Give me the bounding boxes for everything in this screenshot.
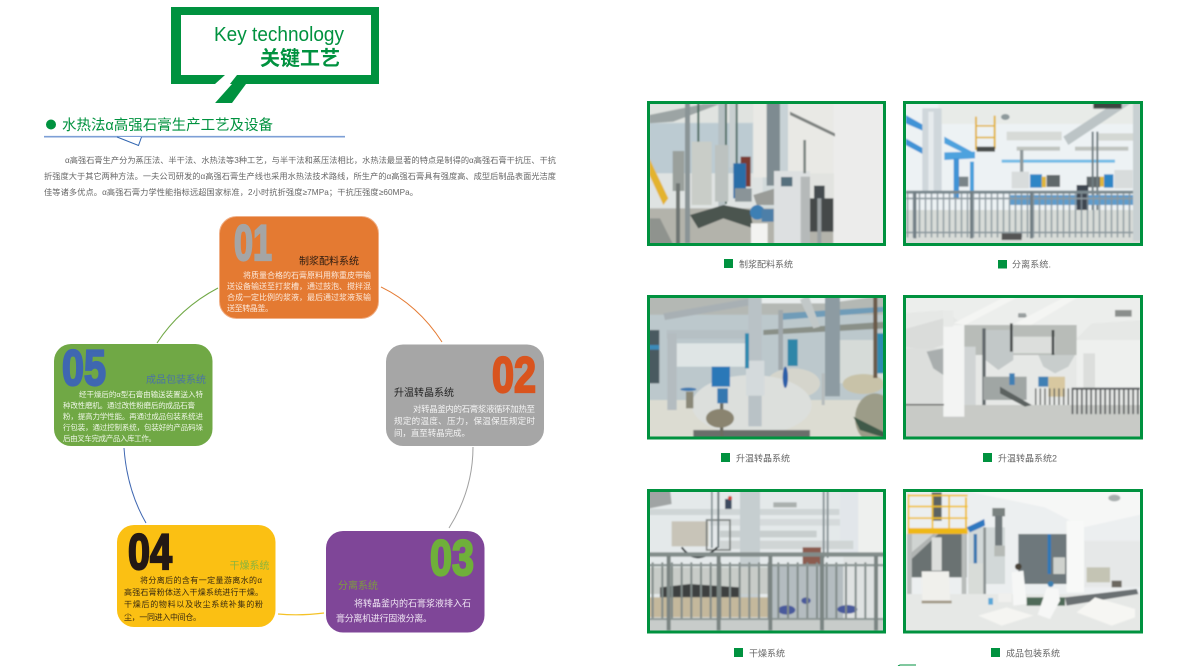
caption: drying system: 干燥系统 xyxy=(749,648,785,658)
caption: separation system xyxy=(998,258,1051,270)
caption: heating crystallization system 2: 升温转晶系统2 xyxy=(998,452,1057,464)
panel: 05 packaging: 行包装，通过控制系统，包装好的产品码垛 xyxy=(63,422,204,432)
title speech bubble: 关键工艺 xyxy=(260,47,340,70)
panel: 02 heating crystallization: 间，直至转晶完成。 xyxy=(394,428,470,438)
intro paragraph: α高强石膏生产分为蒸压法、半干法、水热法等3种工艺，与半干法和蒸压法相比，水热法最显著的特点是制得的α高强石膏干抗压、干抗 xyxy=(65,155,556,165)
panel: 02 heating crystallization: 对转晶釜内的石膏浆液循环加热至 xyxy=(413,404,535,414)
panel: 01 slurry preparation: 合成一定比例的浆液，最后通过浆液泵输 xyxy=(227,292,371,302)
panel: 05 packaging: 后由叉车完成产品入库工作。 xyxy=(63,433,156,443)
panel: 05 packaging: 经干燥后的α型石膏由输送装置送入特 xyxy=(79,389,204,399)
panel: 04 drying: 将分离后的含有一定量游离水的α xyxy=(140,575,262,585)
section heading xyxy=(44,117,345,146)
caption: separation system: 分离系统. xyxy=(1012,258,1051,270)
panel: 01 slurry preparation: 将质量合格的石膏原料用称重皮带输 xyxy=(243,270,371,280)
panel: 03 separation: 将转晶釜内的石膏浆液排入石 xyxy=(354,598,471,608)
panel: 05 packaging: 粉，提高力学性能。再通过成品包装系统进 xyxy=(63,411,204,421)
panel: 04 drying: 04 xyxy=(128,524,172,580)
photo: drying system xyxy=(647,489,887,632)
panel: 02 heating crystallization: 升温转晶系统 xyxy=(394,386,454,399)
panel: 01 slurry preparation: 送至转晶釜。 xyxy=(227,303,273,313)
panel: 04 drying: 干燥系统 xyxy=(230,559,270,572)
panel: 01 slurry preparation: 制浆配料系统 xyxy=(299,254,359,268)
intro paragraph: 佳等诸多优点。α高强石膏力学性能指标远超国家标准，2小时抗折强度≥7MPa；干抗压强度≥60MPa。 xyxy=(44,187,418,197)
arrow: 01 to 02 xyxy=(381,287,442,342)
panel: 04 drying xyxy=(117,524,276,627)
panel: 01 slurry preparation: 送设备输送至打浆槽，通过鼓泡、搅拌混 xyxy=(227,281,371,291)
panel: 02 heating crystallization xyxy=(386,344,544,446)
panel: 03 separation: 分离系统 xyxy=(338,579,378,592)
panel: 03 separation: 03 xyxy=(430,530,474,586)
caption: slurry preparation system: 制浆配料系统 xyxy=(739,258,793,270)
panel: 05 packaging: 05 xyxy=(62,340,106,396)
title speech bubble xyxy=(171,7,379,103)
arrow: 02 to 03 xyxy=(449,447,473,528)
photo: separation system xyxy=(902,102,1143,245)
panel: 03 separation xyxy=(326,530,484,632)
photo: packaging system xyxy=(902,489,1143,632)
photo: slurry preparation system xyxy=(647,102,887,245)
panel: 05 packaging: 种改性磨机。通过改性粉磨后的成品石膏 xyxy=(63,400,196,410)
panel: 04 drying: 高强石膏粉体送入干燥系统进行干燥。 xyxy=(124,587,263,597)
panel: 01 slurry preparation: 01 xyxy=(234,215,272,271)
arrow: 05 to 01 xyxy=(157,288,218,343)
caption: packaging system: 成品包装系统 xyxy=(1006,648,1060,658)
panel: 02 heating crystallization: 规定的温度、压力，保温保压规定时 xyxy=(394,416,535,426)
section heading: 水热法α高强石膏生产工艺及设备 xyxy=(62,117,274,134)
arrow: 04 to 05 xyxy=(124,448,146,523)
photo: heating crystallization system 2 xyxy=(902,295,1143,438)
title speech bubble: Key technology xyxy=(214,24,344,46)
intro paragraph xyxy=(44,155,556,197)
photo: heating crystallization system xyxy=(647,295,895,443)
panel: 01 slurry preparation xyxy=(220,215,378,318)
panel: 05 packaging xyxy=(54,340,212,446)
panel: 02 heating crystallization: 02 xyxy=(492,347,536,403)
caption: heating crystallization system: 升温转晶系统 xyxy=(736,452,790,464)
panel: 03 separation: 膏分离机进行固液分离。 xyxy=(336,612,432,624)
intro paragraph: 折强度大于其它两种方法。一夫公司研发的α高强石膏生产线也采用水热法技术路线，所生产的α高强石膏具有强度高、成型后制品表面光洁度 xyxy=(44,171,556,181)
arrow: 03 to 04 xyxy=(278,613,324,615)
caption: drying system xyxy=(734,648,785,658)
panel: 05 packaging: 成品包装系统 xyxy=(146,373,206,386)
panel: 04 drying: 尘，一同进入中间仓。 xyxy=(124,612,201,622)
panel: 04 drying: 干燥后的物料以及收尘系统补集的粉 xyxy=(124,599,263,609)
